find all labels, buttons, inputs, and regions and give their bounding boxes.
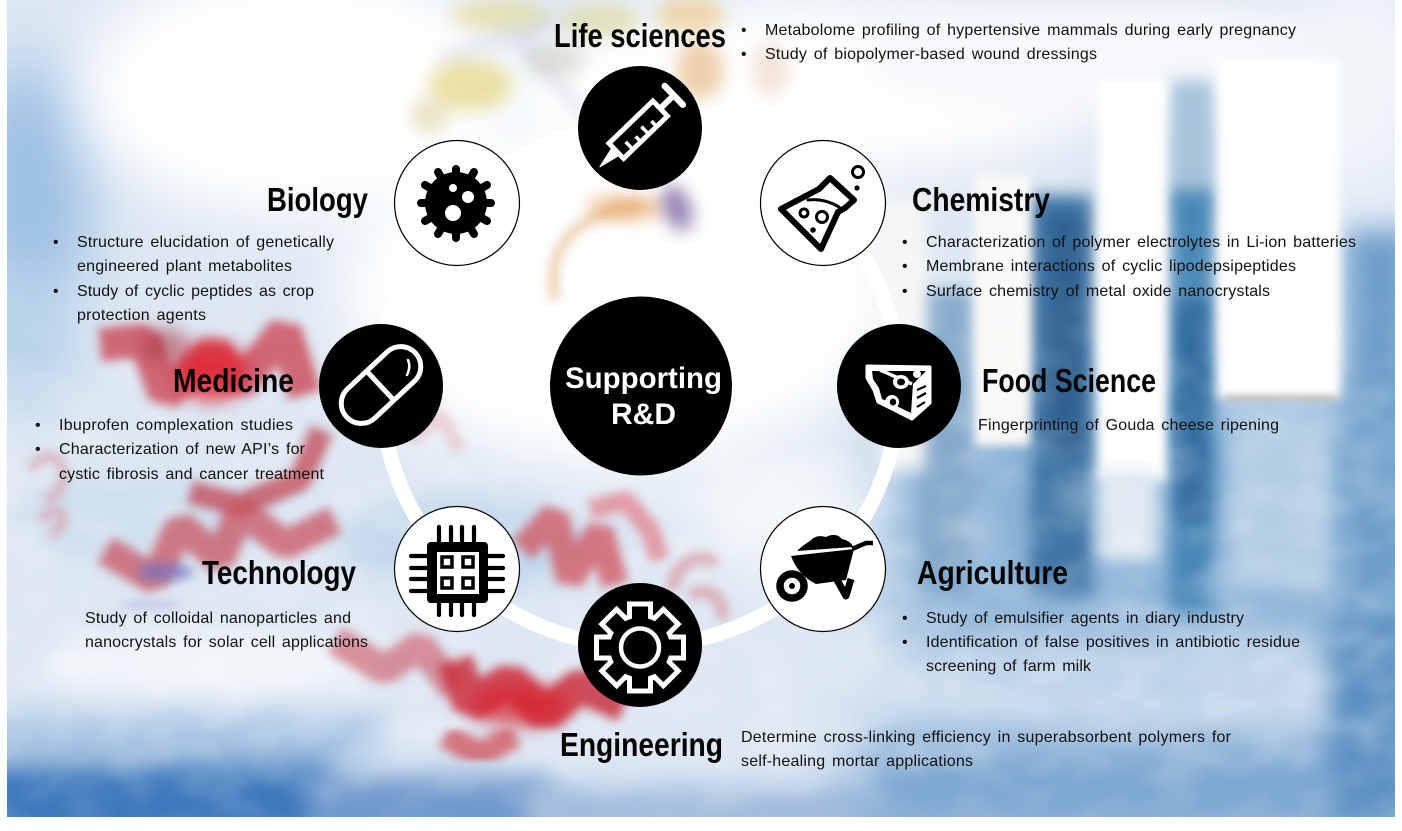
text block: agriculture applications: •	[902, 634, 908, 651]
text block: biology applications: Structure elucidation of genetically	[77, 234, 334, 251]
text block: agriculture applications: Identification of false positives in antibiotic residue	[926, 634, 1300, 651]
red protein ribbons	[30, 327, 722, 755]
text block: technology application: nanocrystals for solar cell applications	[85, 634, 368, 651]
icon: flask (chemistry)	[760, 140, 886, 266]
text block: engineering application	[741, 729, 1232, 770]
text block: agriculture applications	[902, 610, 1300, 675]
text block: biology applications: •	[53, 283, 59, 300]
heading: Food Science: Food Science	[982, 362, 1156, 399]
text block: chemistry applications: •	[902, 258, 908, 275]
text block: chemistry applications: Membrane interactions of cyclic lipodepsipeptides	[926, 258, 1296, 275]
centre circle: Supporting R&D: Supporting	[565, 362, 722, 395]
icon: wheelbarrow (agriculture)	[760, 506, 886, 632]
heading: Life sciences: Life sciences	[554, 17, 726, 54]
text block: chemistry applications	[902, 234, 1356, 300]
text block: chemistry applications: •	[902, 283, 908, 300]
text block: life sciences applications: Metabolome profiling of hypertensive mammals during early pregnancy	[765, 22, 1296, 39]
text block: medicine applications: cystic fibrosis and cancer treatment	[59, 466, 325, 483]
text block: biology applications: engineered plant metabolites	[77, 258, 292, 275]
text block: chemistry applications: Surface chemistry of metal oxide nanocrystals	[926, 283, 1270, 300]
heading: Engineering: Engineering	[560, 726, 723, 763]
text block: life sciences applications	[741, 22, 1296, 63]
centre circle: Supporting R&D: R&D	[611, 398, 676, 431]
text block: life sciences applications: •	[741, 22, 747, 39]
text block: life sciences applications: •	[741, 46, 747, 63]
text block: agriculture applications: Study of emulsifier agents in diary industry	[926, 610, 1244, 627]
heading: Agriculture: Agriculture	[917, 554, 1068, 591]
text block: biology applications: •	[53, 234, 59, 251]
text block: agriculture applications: •	[902, 610, 908, 627]
icon: microchip (technology)	[394, 506, 520, 632]
text block: biology applications	[53, 234, 334, 324]
text block: medicine applications: •	[35, 441, 41, 458]
text block: technology application: Study of colloidal nanoparticles and	[85, 610, 351, 627]
right: blue floor and vials	[890, 390, 1400, 650]
icon: syringe (life sciences)	[578, 66, 702, 190]
ring connecting topics	[381, 128, 899, 646]
icon: virus (biology)	[394, 140, 520, 266]
top: yellow/orange blurred molecule	[428, 59, 512, 111]
text block: biology applications: Study of cyclic peptides as crop	[77, 283, 314, 300]
text block: medicine applications: •	[35, 417, 41, 434]
text block: medicine applications: Characterization of new API’s for	[59, 441, 306, 458]
centre circle: Supporting R&D	[550, 296, 732, 476]
icon: cheese (food science)	[837, 324, 961, 448]
heading: Biology: Biology	[267, 181, 369, 218]
text block: medicine applications	[35, 417, 325, 483]
text block: medicine applications: Ibuprofen complexation studies	[59, 417, 293, 434]
text block: food science application: Fingerprinting of Gouda cheese ripening	[978, 417, 1279, 434]
text block: engineering application: Determine cross-linking efficiency in superabsorbent polymers for	[741, 729, 1232, 746]
heading: Chemistry: Chemistry	[912, 181, 1051, 218]
bottom: blue falloff	[0, 715, 380, 765]
text block: agriculture applications: screening of farm milk	[926, 658, 1092, 675]
text block: life sciences applications: Study of biopolymer-based wound dressings	[765, 46, 1097, 63]
icon: capsule (medicine)	[319, 324, 443, 448]
icon: gear (engineering)	[578, 583, 702, 707]
text block: chemistry applications: •	[902, 234, 908, 251]
text block: biology applications: protection agents	[77, 307, 206, 324]
text block: technology application	[85, 610, 368, 651]
text block: chemistry applications: Characterization of polymer electrolytes in Li-ion batteries	[926, 234, 1356, 251]
heading: Medicine: Medicine	[173, 362, 294, 399]
text block: engineering application: self-healing mortar applications	[741, 753, 973, 770]
heading: Technology: Technology	[202, 554, 357, 591]
